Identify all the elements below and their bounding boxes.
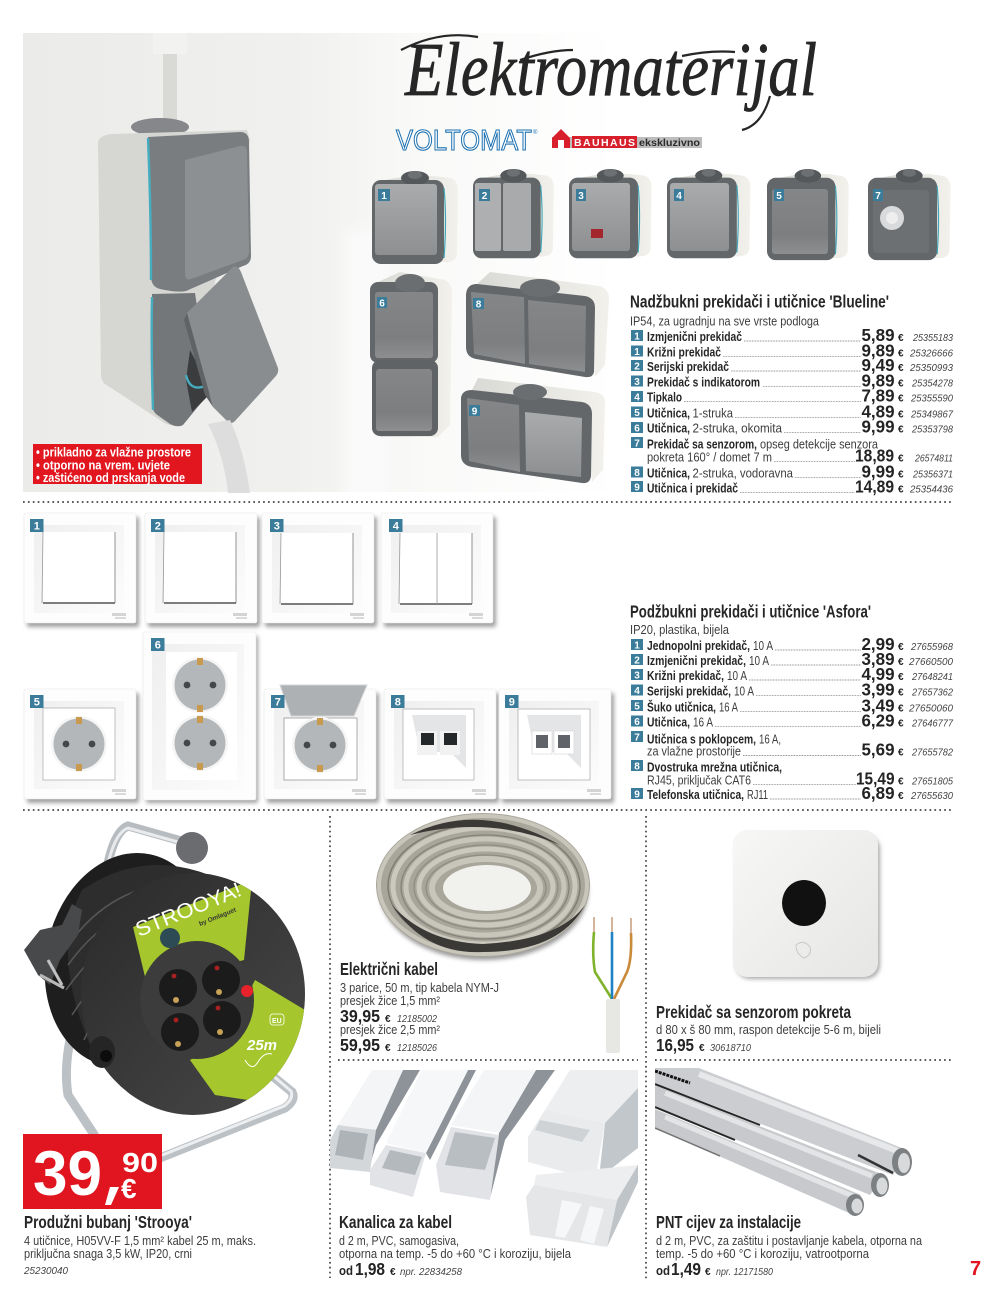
row: Utičnica 16 A: 6,29 (862, 711, 895, 731)
row: Serijski prekidač: 10 A (734, 685, 755, 699)
row: Utičnica, 2-struka, vodoravna: Utičnica, (647, 467, 690, 481)
row: Šuko utičnica: Šuko utičnica, (647, 700, 716, 715)
row: Utičnica, 2-struka, vodoravna (631, 462, 953, 482)
row: Utičnica, 2-struka, vodoravna: € (898, 470, 904, 481)
text block: Produžni bubanj: priključna snaga 3,5 kW, IP20, crni (24, 1247, 192, 1261)
text block: Prekidač sa senzorom pokreta: 30618710 (710, 1043, 751, 1054)
row: Tipkalo: 7,89 (862, 386, 895, 406)
product: Blueline switch 4: 4 (676, 191, 682, 202)
text block: Električni kabel: 59,95 (340, 1035, 380, 1055)
row: Utičnica 16 A (631, 711, 953, 731)
product image: cable reel Strooya: STROOYA! (132, 878, 245, 942)
row: Križni prekidač: Križni prekidač, (647, 669, 724, 683)
product: Asfora double switch 4: 4 (393, 520, 400, 532)
row: Utičnica, 1-struka: Utičnica, (647, 406, 690, 420)
row: Serijski prekidač: 27657362 (911, 688, 953, 699)
row: Utičnica, 2-struka, vodoravna: 8 (634, 468, 640, 479)
row: Telefonska utičnica: 9 (634, 790, 640, 800)
row: Utičnica, 1-struka: 25349867 (910, 409, 953, 420)
row: Utičnica, 2-struka, vodoravna: 2-struka, vodoravna (692, 467, 793, 481)
photo: wall mounted socket (23, 33, 404, 493)
heading: Blueline list: Nadžbukni prekidači i utičnice 'Blueline' (630, 292, 889, 312)
row: Utičnica, 2-struka, okomita: Utičnica, (647, 422, 690, 436)
row: Utičnica i prekidač (631, 476, 953, 496)
row: Dvostruka mrežna utičnica (631, 760, 953, 788)
row: Jednopolni prekidač: 10 A (753, 639, 774, 653)
row: Prekidač s indikatorom: 3 (634, 377, 640, 388)
row: Križni prekidač: 25326666 (909, 348, 953, 359)
row: Telefonska utičnica: 6,89 (862, 783, 895, 803)
row: Križni prekidač: 10 A (727, 669, 748, 683)
row: Utičnica i prekidač: 25354436 (909, 484, 953, 495)
row: Izmjenični prekidač: Izmjenični prekidač (647, 330, 742, 344)
product: Blueline socket and switch 9: 9 (472, 406, 478, 418)
row: Šuko utičnica: 16 A (719, 701, 738, 715)
product image: cable reel Strooya (24, 826, 310, 1158)
text block: Prekidač sa senzorom pokreta: € (699, 1043, 705, 1054)
row: Izmjenični prekidač: 25355183 (912, 333, 953, 344)
product image: cable reel Strooya: 25m (246, 1037, 277, 1054)
text block: Kanalica za kabel: € (390, 1267, 396, 1278)
product: Blueline double vertical socket 6: 6 (379, 298, 385, 310)
row: Utičnica, 1-struka: 4,89 (862, 401, 895, 421)
row: Prekidač s indikatorom: 9,89 (862, 370, 895, 390)
text block: PNT cijev: od (656, 1264, 670, 1278)
product: Blueline switch 1: 1 (381, 191, 387, 202)
row: Telefonska utičnica: 27655630 (910, 791, 953, 802)
row: Prekidač s indikatorom: 25354278 (911, 378, 953, 389)
product image: motion sensor switch (733, 830, 880, 979)
row: Šuko utičnica: 5 (634, 702, 640, 712)
row: Utičnica, 2-struka, okomita: 2-struka, okomita (692, 422, 782, 436)
row: Utičnica, 1-struka: 1-struka (692, 406, 733, 420)
text block: PNT cijev: PNT cijev za instalacije (656, 1212, 801, 1232)
row: Izmjenični prekidač (631, 325, 953, 345)
product image: PNT conduit pipes (655, 1068, 912, 1216)
product: Blueline switch 2: 2 (482, 191, 488, 202)
title: Elektromaterijal: Elektromaterijal (404, 28, 817, 112)
row: Križni prekidač: 4,99 (862, 664, 895, 684)
row: Križni prekidač: Križni prekidač (647, 345, 721, 359)
product: Asfora double switch 4 (381, 513, 496, 627)
row: Utičnica s poklopcem: 5,69 (862, 740, 895, 760)
product: Blueline motion sensor 7: 7 (875, 191, 881, 202)
text block: Električni kabel: presjek žice 2,5 mm² (340, 1023, 440, 1037)
text block: Kanalica za kabel: npr. 22834258 (400, 1267, 462, 1278)
product: Blueline double vertical socket 6 (370, 272, 452, 437)
text block: Kanalica za kabel: Kanalica za kabel (339, 1212, 452, 1232)
product: Blueline double horizontal socket 8: 8 (476, 300, 482, 310)
row: Jednopolni prekidač: 27655968 (910, 642, 953, 653)
row: Križni prekidač: 27648241 (911, 672, 953, 683)
text block: Kanalica za kabel: 1,98 (355, 1259, 385, 1279)
plug (24, 904, 82, 985)
row: Prekidač sa senzorom: 26574811 (914, 454, 953, 465)
product image: cable coil (376, 813, 590, 960)
row: Prekidač sa senzorom: 7 (634, 438, 640, 450)
row: Serijski prekidač: 3,99 (862, 680, 895, 700)
logo: Voltomat: ® (533, 129, 538, 136)
row: Tipkalo: Tipkalo (647, 391, 682, 405)
row: Utičnica s poklopcem: 7 (634, 732, 640, 744)
row: Utičnica, 2-struka, okomita: 6 (634, 424, 640, 434)
text block: Električni kabel (340, 959, 499, 1055)
product: Blueline switch 1 (372, 171, 458, 264)
product: Asfora socket 5 (24, 689, 139, 803)
callout: red feature label: • prikladno za vlažne prostore (36, 444, 191, 460)
row: Utičnica, 2-struka, okomita: € (898, 425, 904, 436)
row: Šuko utičnica: € (898, 704, 904, 715)
text block: PNT cijev: temp. -5 do +60 °C i koroziju, vatrootporna (656, 1247, 869, 1261)
text block: Električni kabel: presjek žice 1,5 mm² (340, 994, 440, 1008)
row: Utičnica i prekidač: 14,89 (855, 476, 894, 496)
row: Dvostruka mrežna utičnica: Dvostruka mrežna utičnica, (647, 761, 782, 775)
text block: Kanalica za kabel: otporna na temp. -5 do +60 °C i koroziju, bijela (339, 1247, 571, 1261)
row: Prekidač sa senzorom: 18,89 (855, 446, 894, 466)
row: Serijski prekidač: 4 (634, 686, 640, 697)
product: Asfora telephone socket 9: 9 (509, 696, 515, 708)
row: Jednopolni prekidač: € (898, 642, 904, 653)
text block: Električni kabel: € (385, 1043, 391, 1054)
row: Prekidač s indikatorom: Prekidač s indikatorom (647, 375, 760, 389)
row: Dvostruka mrežna utičnica: € (898, 776, 904, 787)
title: Elektromaterijal (401, 28, 817, 130)
heading: Asfora list: Podžbukni prekidači i utičnice 'Asfora' (630, 602, 871, 622)
row: Križni prekidač: € (898, 348, 904, 359)
row: Serijski prekidač: 9,49 (862, 355, 895, 375)
row: Utičnica, 1-struka: 5 (634, 408, 640, 419)
product: Blueline socket 5 (767, 169, 849, 260)
row: Serijski prekidač: € (898, 363, 904, 374)
row: Križni prekidač: 9,89 (862, 340, 895, 360)
row: Izmjenični prekidač: 3,89 (862, 649, 895, 669)
text block: Prekidač sa senzorom pokreta: 16,95 (656, 1035, 694, 1055)
page number: 7 (970, 1258, 981, 1280)
text block: Prekidač sa senzorom pokreta (656, 1002, 881, 1055)
row: Serijski prekidač: Serijski prekidač, (647, 685, 731, 699)
product: Asfora switch 1: 1 (34, 520, 40, 532)
row: Serijski prekidač (631, 680, 953, 700)
row: Utičnica, 2-struka, okomita: 9,99 (862, 417, 895, 437)
row: Izmjenični prekidač: € (898, 333, 904, 344)
row: Tipkalo: € (898, 394, 904, 405)
row: Utičnica s poklopcem: 27655782 (911, 748, 953, 758)
product: Asfora double socket 6: 6 (155, 640, 161, 652)
subtitle: Asfora list: IP20, plastika, bijela (630, 623, 729, 637)
row: Tipkalo (631, 386, 953, 406)
row: Izmjenični prekidač: 1 (634, 332, 640, 342)
row: Prekidač sa senzorom (631, 437, 953, 466)
text block: PNT cijev: d 2 m, PVC, za zaštitu i postavljanje kabela, otporna na (656, 1234, 922, 1248)
product image: cable reel Strooya: by Omlaguet (198, 906, 238, 928)
text block: Produžni bubanj: 25230040 (23, 1266, 68, 1277)
row: Dvostruka mrežna utičnica: 15,49 (856, 768, 895, 788)
logo: Bauhaus ekskluzivno: ekskluzivno (639, 138, 700, 149)
text block: Električni kabel: € (385, 1014, 391, 1025)
row: Telefonska utičnica: € (898, 791, 904, 802)
row: Utičnica s poklopcem: za vlažne prostorije (647, 744, 741, 758)
row: Jednopolni prekidač: Jednopolni prekidač, (647, 639, 750, 653)
row: Telefonska utičnica: Telefonska utičnica, (647, 788, 744, 802)
text block: Električni kabel: 12185026 (397, 1043, 437, 1054)
text block: Produžni bubanj: 4 utičnice, H05VV-F 1,5 mm² kabel 25 m, maks. (24, 1234, 256, 1248)
product: Blueline switch 3 (569, 169, 652, 258)
subtitle: Blueline list: IP54, za ugradnju na sve vrste podloga (630, 314, 819, 328)
product: Blueline motion sensor 7 (868, 169, 951, 260)
row: Dvostruka mrežna utičnica: RJ45, priključak CAT6 (647, 773, 751, 787)
text block: Električni kabel: 12185002 (397, 1014, 437, 1025)
row: Utičnica, 2-struka, okomita: 25353798 (911, 425, 953, 436)
callout: red feature label: • zaštićeno od prskanja vode (36, 470, 185, 485)
text block: Prekidač sa senzorom pokreta: d 80 x š 80 mm, raspon detekcije 5-6 m, bijeli (656, 1023, 881, 1037)
price badge: 39,90 € (23, 1134, 162, 1209)
price badge: 39,90 €: 39 (33, 1139, 102, 1209)
row: Izmjenični prekidač (631, 649, 953, 669)
row: Izmjenični prekidač: 2 (634, 656, 640, 666)
row: Tipkalo: 25355590 (910, 394, 953, 405)
row: Prekidač s indikatorom: € (898, 378, 904, 389)
row: Utičnica, 1-struka: € (898, 409, 904, 420)
logo: Bauhaus ekskluzivno: BAUHAUS (574, 137, 635, 149)
row: Utičnica 16 A: Utičnica, (647, 716, 690, 730)
row: Serijski prekidač: Serijski prekidač (647, 360, 729, 374)
row: Izmjenični prekidač: 5,89 (862, 325, 895, 345)
product: Asfora double socket 6 (143, 632, 258, 803)
text block: Produžni bubanj: Produžni bubanj 'Strooya' (24, 1212, 192, 1232)
row: Izmjenični prekidač: 27660500 (908, 657, 953, 668)
row: Utičnica i prekidač: € (898, 484, 904, 495)
row: Utičnica 16 A: 6 (634, 717, 640, 728)
row: Utičnica i prekidač: Utičnica i prekidač (647, 481, 738, 495)
row: Prekidač s indikatorom (631, 370, 953, 390)
product: Blueline socket and switch 9 (461, 378, 605, 483)
product image: stripped cable wires (593, 917, 631, 1053)
row: Utičnica, 2-struka, vodoravna: 9,99 (862, 462, 895, 482)
product: Asfora network socket 8 (384, 689, 499, 803)
product: Asfora switch 2: 2 (155, 520, 161, 532)
text block: Električni kabel: 39,95 (340, 1006, 380, 1026)
text block: Produžni bubanj (23, 1212, 256, 1277)
text block: PNT cijev: npr. 12171580 (716, 1267, 773, 1278)
row: Jednopolni prekidač (631, 634, 953, 654)
product: Asfora network socket 8: 8 (395, 696, 401, 708)
product: Blueline switch 4 (667, 169, 750, 258)
row: Serijski prekidač (631, 355, 953, 375)
text block: Kanalica za kabel (339, 1212, 571, 1279)
row: Prekidač sa senzorom: opseg detekcije senzora (760, 437, 878, 451)
product: Blueline switch 3: 3 (578, 191, 584, 202)
row: Telefonska utičnica (631, 783, 953, 803)
row: Serijski prekidač: € (898, 688, 904, 699)
product: Asfora switch 2 (145, 513, 260, 627)
row: Serijski prekidač: 2 (634, 362, 640, 372)
row: Dvostruka mrežna utičnica: 27651805 (911, 776, 953, 787)
row: Šuko utičnica: 27650060 (908, 704, 953, 715)
row: Jednopolni prekidač: 1 (634, 640, 640, 652)
row: Izmjenični prekidač: € (898, 657, 904, 668)
row: Utičnica s poklopcem: € (898, 748, 904, 758)
text block: Kanalica za kabel: od (339, 1264, 353, 1278)
price list: Asfora (631, 634, 953, 803)
row: Izmjenični prekidač: Izmjenični prekidač, (647, 654, 746, 668)
product: Blueline socket 5: 5 (776, 191, 782, 202)
product: Asfora switch 1 (24, 513, 139, 627)
row: Izmjenični prekidač: 10 A (749, 654, 770, 668)
logo: Bauhaus ekskluzivno (552, 129, 702, 149)
row: Utičnica 16 A: € (898, 719, 904, 730)
callout: red feature label (33, 444, 202, 485)
row: Križni prekidač: € (898, 672, 904, 683)
product: Asfora switch 3 (262, 513, 377, 627)
text block: PNT cijev: 1,49 (671, 1259, 701, 1279)
row: Prekidač sa senzorom: Prekidač sa senzorom, (647, 437, 757, 451)
product: Blueline double horizontal socket 8 (466, 272, 609, 377)
product image: cable reel Strooya: EU (272, 1018, 282, 1025)
text block: Električni kabel: 3 parice, 50 m, tip kabela NYM-J (340, 981, 499, 995)
row: Šuko utičnica (631, 696, 953, 716)
row: Prekidač sa senzorom: pokreta 160° / domet 7 m (647, 451, 772, 465)
text block: Kanalica za kabel: d 2 m, PVC, samogasiva, (339, 1234, 459, 1248)
row: Šuko utičnica: 3,49 (862, 696, 895, 716)
row: Križni prekidač (631, 340, 953, 360)
product: Asfora socket with cover 7: 7 (275, 696, 281, 708)
row: Križni prekidač: 3 (634, 670, 640, 682)
text block: Električni kabel: Električni kabel (340, 959, 438, 979)
row: Prekidač sa senzorom: € (898, 454, 904, 465)
row: Utičnica s poklopcem: 16 A, (759, 732, 781, 746)
price badge: 39,90 €: 90 (122, 1147, 158, 1178)
product: Asfora socket 5: 5 (34, 696, 40, 708)
text block: PNT cijev (656, 1212, 922, 1279)
row: Križni prekidač: 1 (634, 347, 640, 358)
product: Asfora switch 3: 3 (274, 520, 280, 532)
row: Jednopolni prekidač: 2,99 (862, 634, 895, 654)
text block: Prekidač sa senzorom pokreta: Prekidač sa senzorom pokreta (656, 1002, 851, 1022)
row: Utičnica i prekidač: 9 (634, 482, 640, 494)
row: Dvostruka mrežna utičnica: 8 (634, 762, 640, 772)
row: Križni prekidač (631, 664, 953, 684)
row: Utičnica s poklopcem (631, 731, 953, 760)
row: Utičnica, 2-struka, okomita (631, 417, 953, 437)
row: Utičnica, 1-struka (631, 401, 953, 421)
product: Blueline switch 2 (473, 169, 554, 258)
row: Telefonska utičnica: RJ11 (747, 788, 768, 802)
price list: Blueline (631, 325, 953, 496)
text block: PNT cijev: € (705, 1267, 711, 1278)
product image: cable ducts (330, 1070, 638, 1247)
row: Utičnica 16 A: 16 A (693, 716, 714, 730)
row: Utičnica s poklopcem: Utičnica s poklopcem, (647, 732, 756, 746)
row: Utičnica, 2-struka, vodoravna: 25356371 (912, 470, 953, 481)
logo: Voltomat: VOLTOMAT (396, 125, 532, 157)
row: Tipkalo: 4 (634, 392, 640, 404)
product: Asfora socket with cover 7 (264, 685, 379, 803)
row: Serijski prekidač: 25350993 (909, 363, 953, 374)
product: Asfora telephone socket 9 (499, 689, 614, 803)
callout: red feature label: • otporno na vrem. uvjete (36, 458, 170, 472)
price badge: 39,90 €: € (121, 1173, 137, 1204)
row: Utičnica 16 A: 27646777 (911, 719, 953, 730)
